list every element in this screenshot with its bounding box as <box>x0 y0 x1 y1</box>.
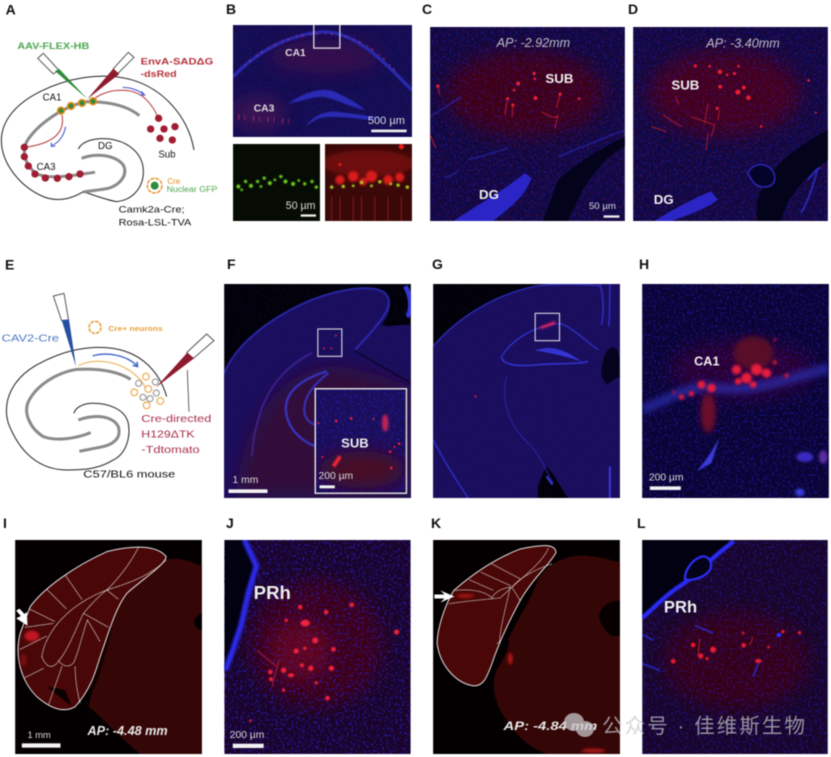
subiculum red neurons <box>147 115 179 144</box>
panel letter F: F <box>227 256 236 272</box>
Cre+ legend icon <box>89 321 101 333</box>
labels: Cre-directed <box>141 414 212 425</box>
panel H: CA1 zoom <box>641 283 830 499</box>
red neurons <box>249 602 399 722</box>
CAV2 pipette <box>53 293 76 367</box>
labels <box>17 41 217 227</box>
labels: DG <box>98 141 112 152</box>
panel C: subiculum AP -2.92: AP: -2.92mm <box>496 36 570 50</box>
panel I: brain section AP -4.48 <box>14 539 203 755</box>
blue arrow <box>93 354 138 367</box>
panel C: subiculum AP -2.92: 50 µm <box>589 201 616 212</box>
labels: -Tdtomato <box>141 445 200 456</box>
panel A: rabies tracing schematic <box>1 1 217 227</box>
outlined hemisphere <box>437 546 556 686</box>
panel C: subiculum AP -2.92 <box>429 26 626 222</box>
panel F: coronal section with SUB inset: 1 mm <box>232 475 258 486</box>
dentate layer <box>78 417 119 451</box>
panel letter A: A <box>6 1 16 17</box>
panel B top: hippocampus overview: 500 µm <box>368 115 405 127</box>
hippocampus outline <box>1 76 194 202</box>
panel B bottom left: green nuclei <box>232 143 321 222</box>
outlined hemisphere <box>18 547 166 710</box>
panel G: coronal section with CA1 box <box>432 283 621 499</box>
panel L: PRh zoom <box>641 539 829 755</box>
panel C: subiculum AP -2.92: SUB <box>545 71 573 86</box>
labels: CAV2-Cre <box>2 333 59 344</box>
red neurons <box>436 72 580 107</box>
grey neurons <box>136 379 159 402</box>
panel letter G: G <box>432 256 443 272</box>
panel I: brain section AP -4.48: 1 mm <box>28 730 51 740</box>
panel H: CA1 zoom: CA1 <box>694 354 719 368</box>
midbrain silhouette <box>494 555 620 754</box>
panel J: PRh zoom <box>223 539 412 755</box>
panel letter D: D <box>628 1 638 17</box>
panel B bottom right: merged <box>324 143 413 222</box>
panel J: PRh zoom: PRh <box>254 582 291 603</box>
panel B top: hippocampus overview: CA3 <box>254 104 275 115</box>
labels: H129ΔTK <box>141 429 195 440</box>
H129 pipette <box>156 334 214 387</box>
panel D: subiculum AP -3.40: SUB <box>671 77 699 92</box>
red cell cluster <box>673 338 788 400</box>
panel L: PRh zoom: PRh <box>664 597 697 616</box>
panel letter E: E <box>5 256 14 272</box>
panel B top: hippocampus overview: CA1 <box>285 48 306 59</box>
panel letter J: J <box>226 515 234 531</box>
red neurons <box>671 630 801 664</box>
labels: Cre+ neurons <box>108 326 163 333</box>
orange axon <box>78 361 146 388</box>
blue direction arrows <box>51 87 145 146</box>
panel E: CAV2 tracing schematic <box>2 256 214 480</box>
panel B top: hippocampus overview <box>232 24 413 138</box>
panel letter K: K <box>431 515 441 531</box>
panel letter I: I <box>3 515 7 531</box>
panel letter L: L <box>637 515 646 531</box>
dentate gyrus layer <box>82 155 125 192</box>
CA3 red neurons <box>21 144 84 182</box>
legend icon: Cre nuclear GFP <box>147 178 162 193</box>
arrow <box>16 609 28 626</box>
panel D: subiculum AP -3.40 <box>632 26 829 222</box>
red neurons <box>694 64 817 128</box>
labelled neurons <box>131 373 164 409</box>
starter neurons <box>58 98 96 114</box>
leader line <box>187 370 189 412</box>
labels: EnvA-SADΔG <box>141 57 213 67</box>
labels: -dsRed <box>141 69 177 79</box>
labels: Sub <box>158 149 176 160</box>
inset: SUB <box>314 387 408 495</box>
labels: Cre <box>167 177 181 186</box>
panel B bottom left: green nuclei: 50 µm <box>286 200 316 212</box>
cell layer CA1 to CA3 <box>24 102 139 177</box>
arrow <box>434 591 454 602</box>
labels: CA3 <box>37 162 55 173</box>
injection pipette: EnvA <box>87 52 134 99</box>
panel F: coronal section with SUB inset: SUB <box>341 436 369 451</box>
panel J: PRh zoom: 200 µm <box>230 730 264 741</box>
wechat icon <box>564 713 594 737</box>
cell layer <box>27 369 131 439</box>
panel D: subiculum AP -3.40: AP: -3.40mm <box>705 36 780 50</box>
labels: Rosa-LSL-TVA <box>119 217 192 227</box>
panel D: subiculum AP -3.40: DG <box>654 192 674 207</box>
panel H: CA1 zoom: 200 µm <box>649 473 683 484</box>
panel I: brain section AP -4.48: AP: -4.48 mm <box>86 724 168 738</box>
midbrain silhouette <box>88 559 202 754</box>
panel C: subiculum AP -2.92: DG <box>479 187 499 202</box>
panel F: coronal section with SUB inset <box>223 283 412 499</box>
hippocampus outline <box>6 347 167 470</box>
watermark: WeChat official account: 公众号 · 佳维斯生物 <box>602 715 805 738</box>
labels <box>2 326 212 480</box>
panel F: coronal section with SUB inset: 200 µm <box>318 471 353 482</box>
labels: AAV-FLEX-HB <box>17 41 90 51</box>
labels: C57/BL6 mouse <box>83 469 176 480</box>
labels: Nuclear GFP <box>167 185 217 194</box>
panel letter B: B <box>226 1 236 17</box>
labels: Camk2a-Cre; <box>119 204 185 214</box>
labels: CA1 <box>43 93 61 104</box>
panel K: brain section AP -4.84 <box>432 539 621 755</box>
injection pipette: AAV <box>38 53 87 99</box>
panel letter C: C <box>422 1 432 17</box>
projection curves <box>25 90 157 147</box>
panel K: brain section AP -4.84: AP: -4.84 mm <box>502 719 598 733</box>
panel letter H: H <box>639 256 649 272</box>
